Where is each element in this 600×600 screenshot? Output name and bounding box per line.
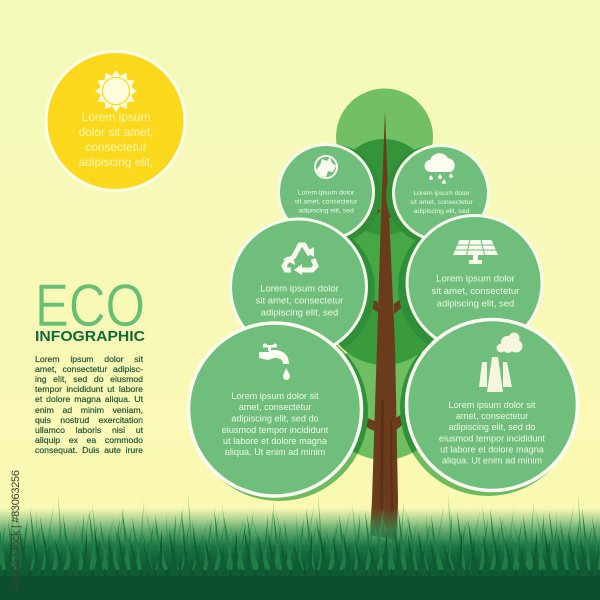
text: Lorem ipsum dolor [413, 190, 470, 197]
sun text: consectetur [85, 140, 147, 154]
text: sit amet, consectetur [432, 286, 519, 297]
text: adipiscing elit, sed [437, 298, 514, 310]
icon: globe [315, 156, 337, 178]
panel: middle right circle [407, 216, 542, 350]
text: sit amet, consectetur [410, 199, 474, 206]
panel: large right circle [406, 320, 578, 490]
icon: rain cloud [424, 153, 455, 184]
text: eiusmod tempor incididunt [439, 434, 546, 444]
text: adipiscing elit, sed [298, 208, 354, 214]
icon: solar panel [453, 240, 498, 264]
icon: recycle [283, 245, 316, 275]
icon: factory chimneys and smoke [479, 332, 522, 392]
body paragraph: aliquip ex ea commodo [35, 435, 143, 445]
text: aliqua. Ut enim ad minim [442, 456, 542, 466]
body paragraph [35, 354, 144, 455]
sun text: Lorem ipsum [82, 110, 150, 124]
body paragraph: enim ad minim veniam, [35, 405, 143, 415]
stock id label: Adobe Stock | #83063256 [10, 470, 22, 590]
subtitle: INFOGRAPHIC: INFOGRAPHIC [35, 328, 145, 345]
text: Lorem ipsum dolor [260, 284, 339, 294]
body paragraph: consequat. Duis aute irure [35, 445, 143, 455]
body paragraph: et dolore magna aliqua. Ut [35, 394, 143, 404]
text: aliqua. Ut enim ad minim [225, 447, 325, 457]
sun text: adipiscing elit, [79, 155, 153, 169]
text: adipiscing elit, sed do [231, 414, 319, 424]
text: Lorem ipsum dolor sit [449, 400, 536, 410]
text: amet, consectetur [239, 402, 311, 412]
text: adipiscing elit, sed [414, 208, 469, 215]
panel: large left circle [188, 323, 362, 496]
shadows of the circles [218, 144, 553, 501]
panel: small left circle [278, 144, 374, 240]
text: Lorem ipsum dolor [298, 190, 355, 196]
text: eiusmod tempor incididunt [222, 425, 329, 435]
body paragraph: amet, consectetur adipisc- [35, 364, 143, 374]
body paragraph: Lorem ipsum dolor sit [35, 354, 143, 364]
body paragraph: quis nostrud exercitation [35, 415, 143, 425]
panel: middle left circle [230, 219, 366, 355]
text: amet, consectetur [456, 411, 528, 421]
body paragraph: ullamco laboris nisi ut [35, 425, 143, 435]
body paragraph: ing elit, sed do eiusmod [35, 374, 143, 384]
text: ut labore et dolore magna [440, 444, 545, 454]
text: ut labore et dolore magna [223, 436, 328, 446]
text: Lorem ipsum dolor sit [231, 391, 319, 401]
text: adipiscing elit, sed do [449, 422, 535, 432]
sun text: dolor sit amet, [79, 125, 153, 139]
text: sit amet, consectetur [295, 198, 358, 206]
tree canopy [324, 88, 444, 460]
sun panel [46, 52, 185, 190]
panel: small right circle [394, 146, 488, 240]
text: sit amet, consectetur [256, 296, 343, 306]
grass [0, 494, 600, 600]
tree trunk and branches [345, 110, 424, 540]
text: Lorem ipsum dolor [436, 274, 515, 284]
body paragraph: tempor incididunt ut labore [35, 384, 143, 394]
text: adipiscing elit, sed [261, 308, 338, 318]
title: ECO: ECO [35, 272, 145, 339]
icon: water tap [259, 344, 290, 380]
icon: sun [95, 70, 137, 112]
